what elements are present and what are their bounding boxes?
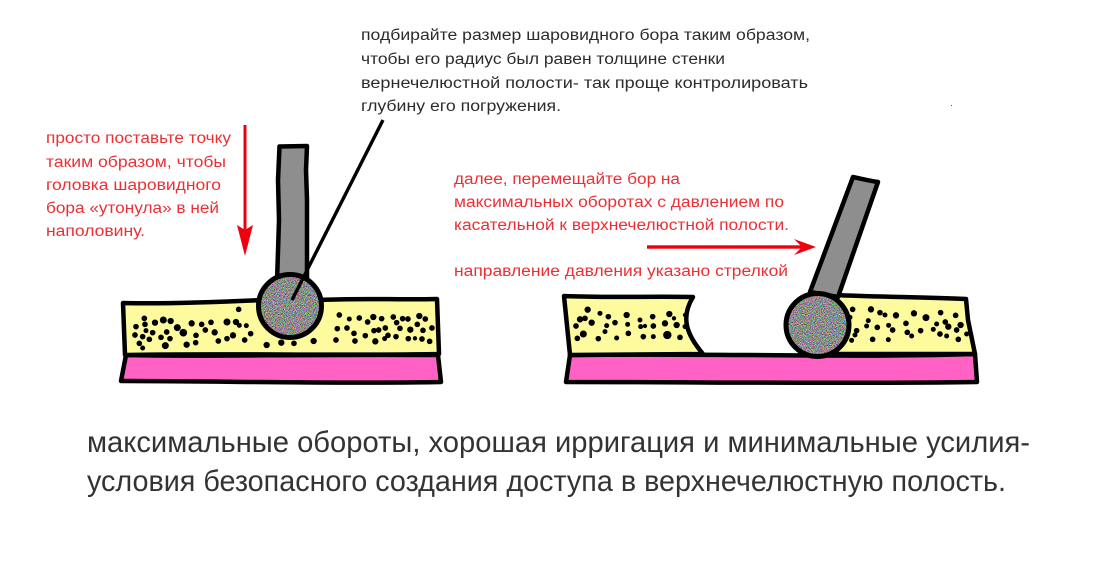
bone pores: [574, 307, 969, 342]
text: top black annotation: [361, 27, 810, 115]
diagram: left bur and bone: [121, 120, 441, 383]
bur shaft: [810, 177, 878, 297]
text: right red instruction: максимальных оборотах с давлением по: [454, 194, 784, 211]
text: left red instruction: бора «утонула» в ней: [46, 200, 219, 217]
bur ball: [782, 290, 852, 360]
yellow bone layer: [123, 299, 439, 355]
text: bottom conclusion: максимальные обороты, хорошая ирригация и минимальные усилия-: [87, 426, 1030, 459]
bone pores: [133, 307, 434, 350]
arrow: red downward: [237, 125, 253, 256]
text: right red instruction: направление давления указано стрелкой: [454, 263, 788, 280]
text: right red instruction: далее, перемещайте бор на: [454, 171, 680, 188]
text: top black annotation: глубину его погружения.: [361, 98, 561, 115]
text: left red instruction: просто поставьте точку: [46, 130, 231, 147]
left yellow bone: [564, 296, 703, 355]
bur ball: [255, 271, 325, 341]
text: top black annotation: вернечелюстной полости- так проще контролировать: [361, 75, 808, 92]
text: bottom conclusion: условия безопасного создания доступа в верхнечелюстную полость.: [87, 465, 1006, 498]
text: right red instruction: касательной к верхнечелюстной полости.: [454, 217, 789, 234]
arrow: red rightward: [647, 239, 816, 255]
text: left red instruction: головка шаровидного: [46, 177, 221, 194]
text: left red instruction: таким образом, чтобы: [46, 154, 226, 171]
text: left red instruction: [46, 130, 231, 240]
text: bottom conclusion: [87, 426, 1030, 498]
text: right red instruction: [454, 171, 789, 280]
bur shaft: [277, 146, 307, 282]
text: top black annotation: чтобы его радиус был равен толщине стенки: [361, 51, 725, 68]
text: top black annotation: подбирайте размер шаровидного бора таким образом,: [361, 27, 810, 44]
right yellow bone: [835, 295, 975, 354]
diagram: right bur and bone: [564, 177, 977, 383]
pink membrane layer: [121, 355, 441, 383]
pink membrane layer: [566, 354, 977, 383]
leader line: [292, 120, 383, 300]
text: left red instruction: наполовину.: [46, 223, 145, 240]
